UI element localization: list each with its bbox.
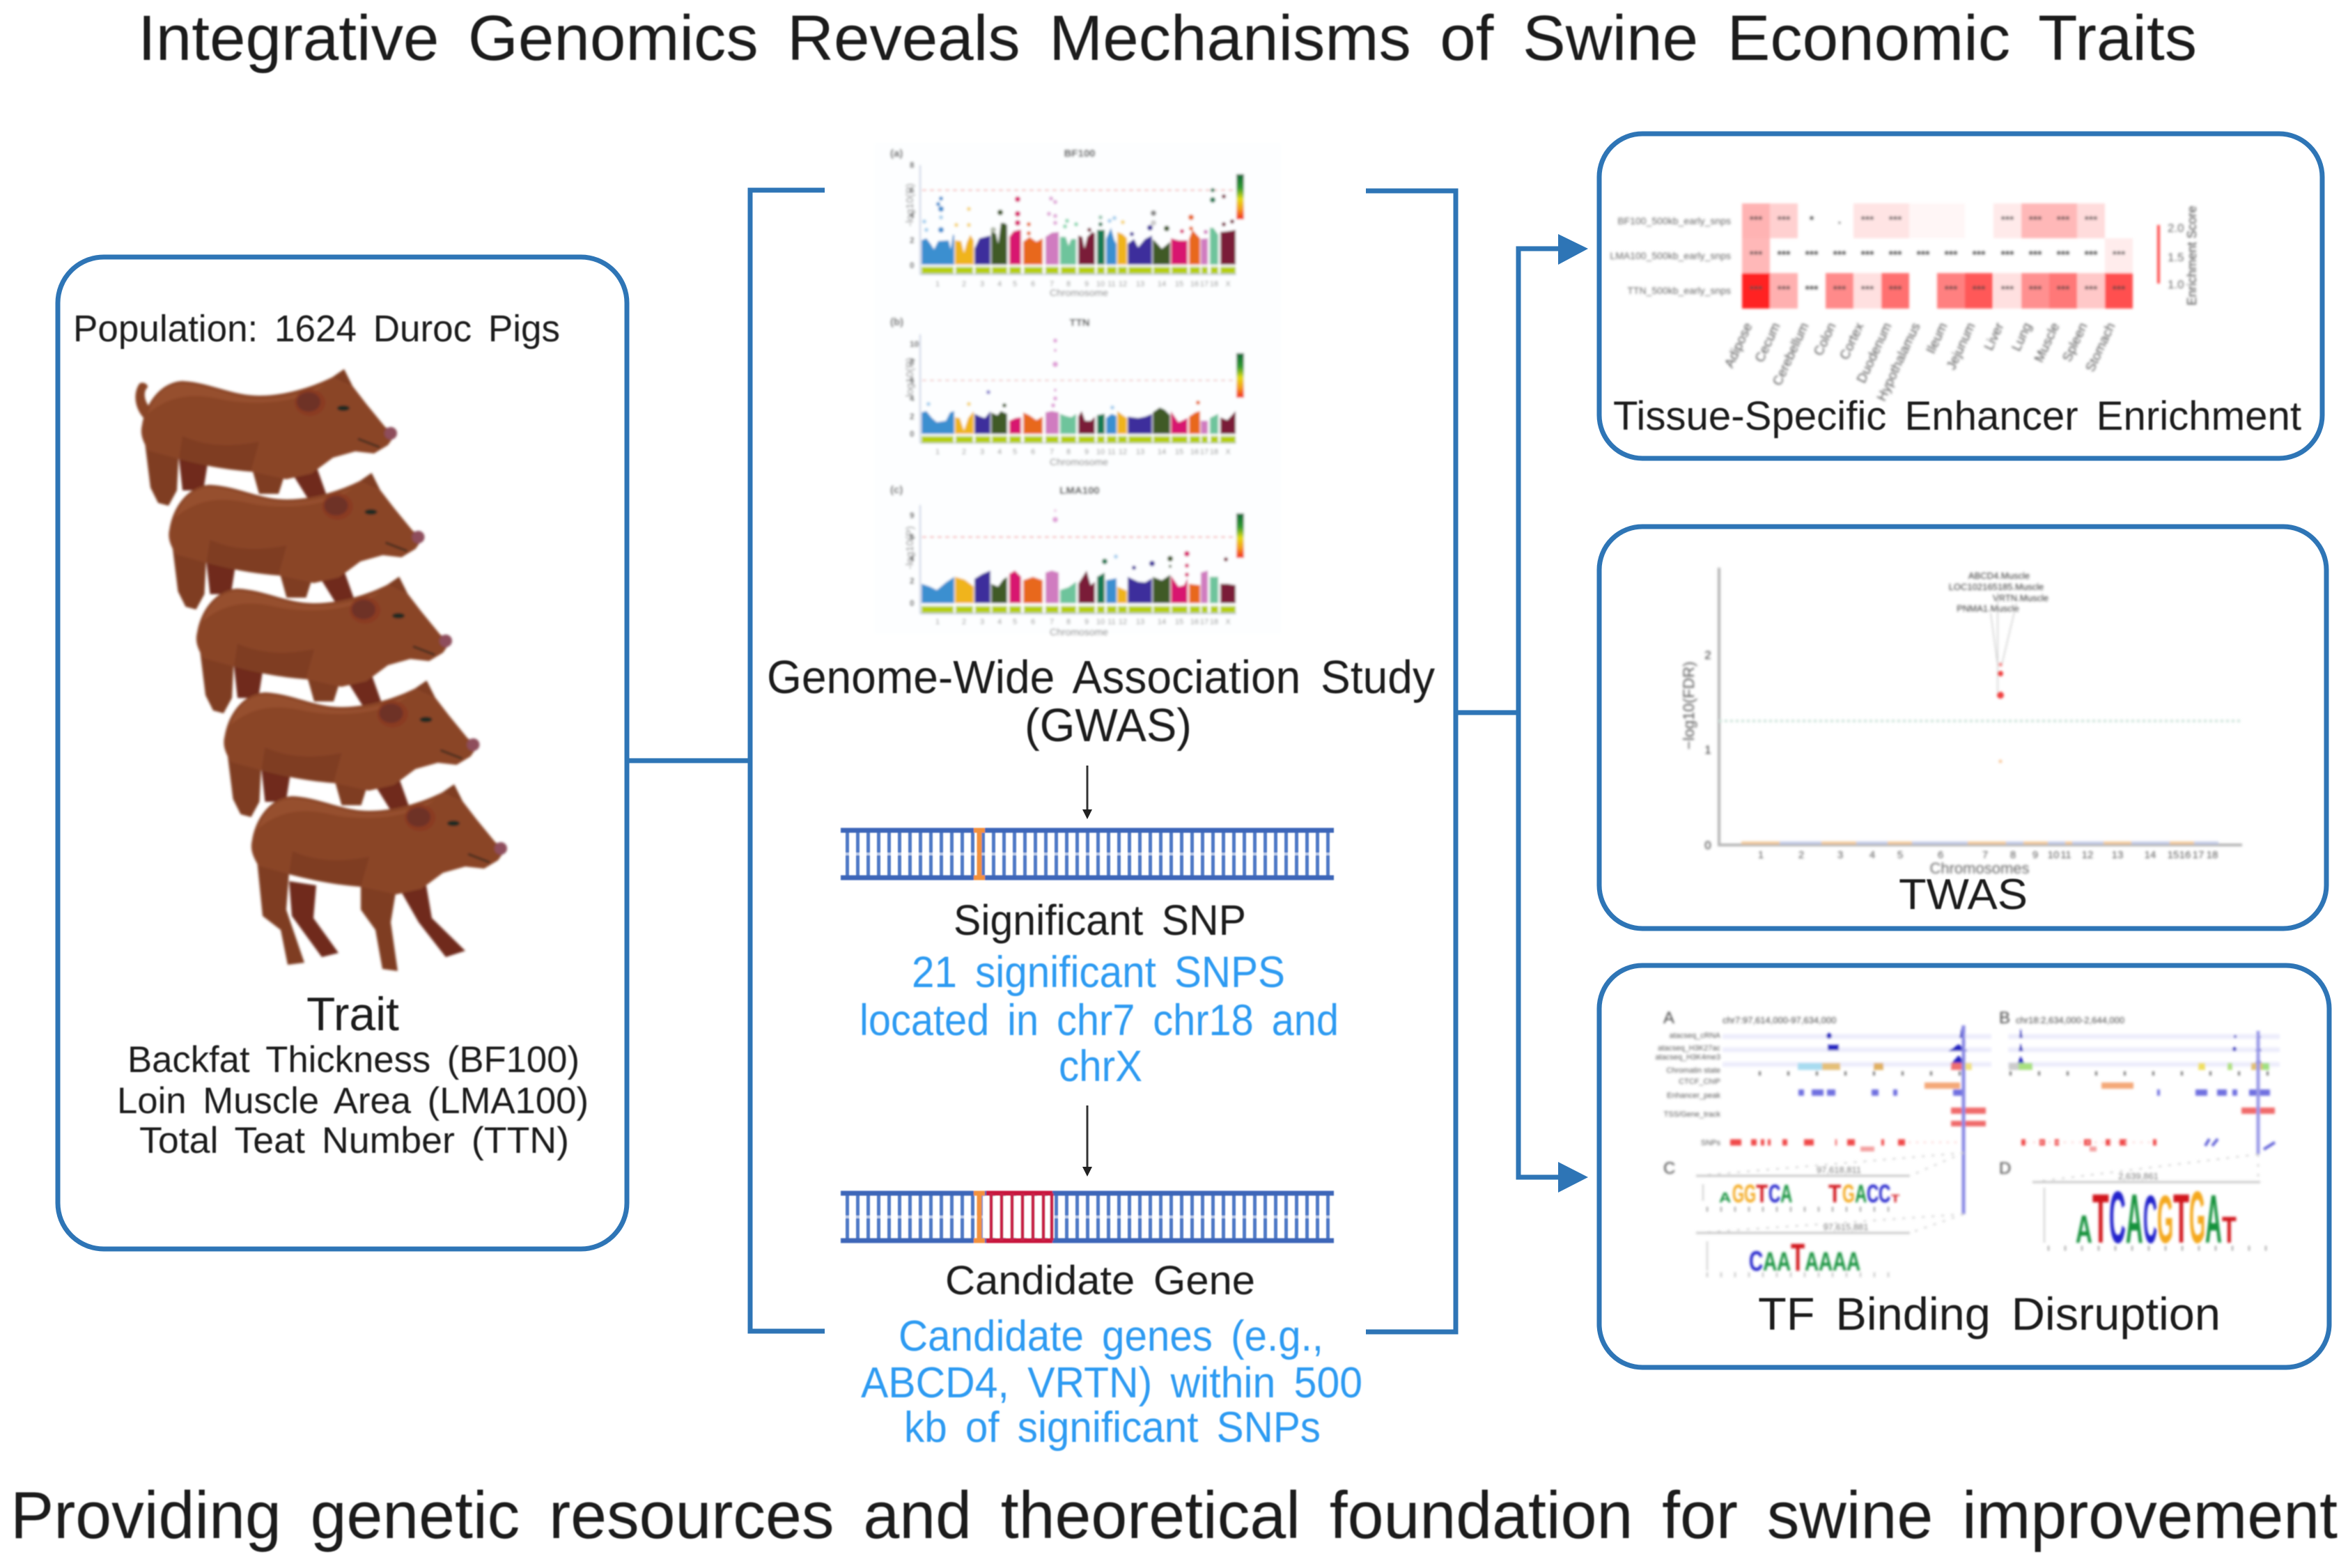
heading: significant SNP: Significant SNP (954, 896, 1246, 944)
TWAS Manhattan plot: −log10(FDR) (1680, 662, 1697, 750)
heatmap significance marks: *** (2085, 249, 2098, 261)
heatmap tissue labels: Ileum (1924, 320, 1951, 356)
TWAS Manhattan plot: 17 (2193, 849, 2204, 861)
heatmap tissue labels: Cecum (1752, 320, 1784, 365)
TWAS Manhattan plot: 6 (1938, 849, 1943, 861)
motif logo: C upper: G (1732, 1181, 1744, 1208)
genome tracks and motif logos: Enhancer_peak (1667, 1092, 1720, 1100)
motif logo: C lower: A (1819, 1248, 1833, 1277)
TWAS Manhattan plot: 5 (1897, 849, 1903, 861)
TWAS Manhattan plot: 9 (2032, 849, 2038, 861)
trait list (117, 1039, 589, 1161)
arrow: GWAS to SNP (1082, 766, 1092, 819)
heatmap significance marks: *** (2001, 249, 2014, 261)
trait list: Backfat Thickness (BF100) (127, 1039, 580, 1080)
genome tracks and motif logos (1655, 1009, 2280, 1279)
Manhattan plot: LMA100: 2 (962, 448, 966, 456)
Manhattan plot: LMA100: 13 (1136, 448, 1144, 456)
Manhattan plot: BF100: 3 (980, 280, 984, 288)
Manhattan plot: LMA100: Chromosome (1050, 456, 1108, 467)
Manhattan plot: TTN: 2 (962, 618, 966, 626)
Manhattan plot: TTN: 16 (1190, 618, 1199, 626)
motif logo: C lower: A (1805, 1248, 1819, 1277)
heatmap significance marks: *** (2029, 249, 2042, 261)
text: SNP result: located in chr7 chr18 and (860, 996, 1339, 1045)
heatmap significance marks: *** (1778, 215, 1791, 226)
TWAS Manhattan plot: PNMA1.Muscle (1957, 603, 2019, 614)
Manhattan plot: LMA100: 6 (1031, 448, 1035, 456)
motif logo: C upper (1719, 1180, 1899, 1209)
heatmap significance marks: *** (1778, 249, 1791, 261)
motif logo: C lower (1749, 1235, 1860, 1279)
heatmap significance marks: *** (1917, 249, 1930, 261)
genome tracks and motif logos: atacseq_cRNA (1670, 1032, 1721, 1040)
heatmap tissue labels (1722, 320, 2119, 403)
TWAS Manhattan plot: VRTN.Muscle (1993, 593, 2048, 603)
motif logo: D: A (2205, 1182, 2222, 1257)
heatmap (1610, 203, 2199, 403)
Manhattan plot: LMA100: 4 (997, 448, 1002, 456)
Manhattan plot: TTN: 7 (1050, 618, 1054, 626)
heatmap significance marks: *** (1973, 284, 1986, 296)
Manhattan plot: LMA100: 7 (1050, 448, 1054, 456)
Manhattan plot: BF100: 13 (1136, 280, 1144, 288)
arrow: to enhancer panel (1558, 234, 1588, 265)
panel: tissue-specific enhancer enrichment (1599, 134, 2322, 458)
icon: DNA with SNP (840, 828, 1335, 880)
Manhattan plot: TTN: 9 (910, 511, 915, 520)
Manhattan plot: BF100: 1 (935, 280, 940, 288)
text: SNP result: chrX (1059, 1042, 1142, 1091)
heading: enhancer enrichment: Tissue-Specific Enhancer Enrichment (1613, 394, 2301, 439)
Manhattan plot: LMA100: 17 (1200, 448, 1208, 456)
motif logo: C upper: A (1855, 1180, 1867, 1208)
heatmap significance marks: *** (1750, 249, 1763, 261)
Manhattan plot: LMA100: 6 (910, 375, 915, 385)
title: Integrative Genomics Reveals Mechanisms of Swine Economic Traits (138, 3, 2197, 74)
TWAS Manhattan plot: 14 (2145, 849, 2156, 861)
motif logo: D: T (2092, 1180, 2109, 1258)
motif logo: D: G (2189, 1175, 2205, 1259)
heatmap tissue labels: Liver (1982, 320, 2007, 352)
connector: bracket to outcome panels (1456, 249, 1559, 1177)
motif logo: C lower: A (1846, 1248, 1860, 1277)
Manhattan plot: LMA100: 11 (1107, 448, 1116, 456)
heatmap tissue labels: Cerebellum (1770, 320, 1812, 388)
Manhattan plot: BF100: X (1225, 280, 1231, 288)
genome tracks and motif logos: TSS/Gene_track (1664, 1110, 1720, 1119)
Manhattan plot: LMA100: 15 (1175, 448, 1183, 456)
heatmap significance marks: *** (1750, 284, 1763, 296)
TWAS Manhattan plot: LOC102165185.Muscle (1949, 582, 2044, 592)
motif logo: C upper: G (1842, 1181, 1855, 1208)
heatmap significance marks: *** (2029, 215, 2042, 226)
TWAS Manhattan plot: 15 (2168, 849, 2179, 861)
TWAS Manhattan plot: 3 (1837, 849, 1843, 861)
Manhattan plot: BF100: 6 (1031, 280, 1035, 288)
motif logo: C lower: A (1833, 1248, 1846, 1277)
heatmap tissue labels: Adipose (1722, 320, 1756, 370)
heatmap tissue labels: Lung (2009, 320, 2035, 353)
Manhattan plot: BF100: 12 (1119, 280, 1127, 288)
genome tracks and motif logos: chr7:97,614,000-97,634,000 (1723, 1015, 1836, 1025)
Manhattan plot: LMA100: X (1225, 448, 1231, 456)
Manhattan plot: TTN: X (1225, 618, 1231, 626)
Manhattan plot: TTN: 12 (1119, 618, 1127, 626)
genome tracks and motif logos: D (1999, 1159, 2011, 1178)
trait list: Loin Muscle Area (LMA100) (117, 1080, 589, 1121)
Manhattan plot: TTN: 2 (910, 576, 915, 586)
genome tracks and motif logos: Chromatin state (1666, 1066, 1720, 1075)
heading: GWAS: Genome-Wide Association Study (767, 651, 1435, 704)
Manhattan plot: LMA100: 10 (910, 339, 919, 349)
heatmap significance marks (1750, 215, 2126, 296)
text: SNP result: 21 significant SNPS (912, 948, 1285, 997)
icon: stack of five pigs (135, 369, 507, 971)
heatmap significance marks: *** (1833, 249, 1846, 261)
Manhattan plot: BF100: 14 (1158, 280, 1166, 288)
panel: TWAS (1599, 527, 2326, 929)
Manhattan plot: TTN: LMA100 (1059, 485, 1100, 497)
trait list: Total Teat Number (TTN) (139, 1120, 569, 1161)
panel: TF binding disruption (1599, 965, 2329, 1367)
population label: Population: 1624 Duroc Pigs (73, 308, 560, 350)
heatmap significance marks: *** (1945, 284, 1958, 296)
genome tracks and motif logos: 97,618,811 (1817, 1165, 1861, 1175)
motif logo: D: T (2222, 1209, 2237, 1251)
text: candidate gene result: kb of significant SNPs (904, 1404, 1321, 1452)
heatmap colour legend: 1.5 (2168, 251, 2184, 264)
TWAS Manhattan plot: 11 (2060, 849, 2071, 861)
TWAS Manhattan plot: 2 (1704, 649, 1711, 662)
Manhattan plot: LMA100: (b) (890, 316, 903, 328)
heatmap colour legend: 2.0 (2168, 222, 2184, 235)
Manhattan plot: BF100: 4 (910, 210, 915, 220)
motif logo: C upper: T (1756, 1180, 1768, 1208)
Manhattan plot: TTN: 18 (1210, 618, 1218, 626)
text: candidate gene result: ABCD4, VRTN) within 500 (861, 1359, 1362, 1407)
Manhattan plot: BF100: (a) (890, 148, 903, 160)
Manhattan plot: TTN: 15 (1175, 618, 1183, 626)
Manhattan plot: BF100: 16 (1190, 280, 1199, 288)
heatmap significance marks: *** (2057, 284, 2070, 296)
Manhattan plot: BF100: 5 (1013, 280, 1017, 288)
Manhattan plot: LMA100: 0 (910, 429, 915, 439)
heatmap significance marks: *** (2029, 284, 2042, 296)
connector: traits to analysis bracket (627, 758, 750, 763)
text: candidate gene result (861, 1312, 1362, 1452)
Manhattan plot: LMA100: 4 (910, 394, 915, 403)
genome tracks and motif logos: atacseq_H3K4me3 (1655, 1053, 1720, 1062)
heatmap significance marks: *** (1945, 249, 1958, 261)
genome tracks and motif logos: CTCF_ChIP (1679, 1078, 1720, 1086)
heatmap significance marks: *** (1889, 249, 1902, 261)
heatmap significance marks: *** (2057, 215, 2070, 226)
TWAS Manhattan plot: 1 (1758, 849, 1764, 861)
Manhattan plot: LMA100: TTN (1069, 317, 1090, 329)
heatmap significance marks: . (1838, 215, 1841, 226)
Manhattan plot: LMA100: 5 (1013, 448, 1017, 456)
heatmap significance marks: *** (2001, 284, 2014, 296)
genome tracks and motif logos: C (1663, 1159, 1675, 1178)
heatmap significance marks: *** (1889, 284, 1902, 296)
motif logo: D (2076, 1175, 2237, 1259)
TWAS Manhattan plot (1680, 568, 2242, 877)
TWAS Manhattan plot: 13 (2112, 849, 2123, 861)
TWAS Manhattan plot: 1 (1704, 743, 1711, 756)
heatmap significance marks: *** (2057, 249, 2070, 261)
heatmap significance marks: *** (2085, 215, 2098, 226)
heatmap significance marks: *** (1889, 215, 1902, 226)
motif logo: C upper: C (1879, 1180, 1890, 1208)
motif logo: C lower: A (1763, 1248, 1777, 1277)
TWAS Manhattan plot: 12 (2082, 849, 2093, 861)
motif logo: C upper: C (1768, 1180, 1780, 1208)
genome tracks and motif logos: A (1663, 1009, 1674, 1027)
bracket: right (1366, 191, 1456, 1332)
heatmap significance marks: *** (1861, 249, 1874, 261)
motif logo: C lower: T (1791, 1235, 1805, 1279)
Manhattan plot: BF100: 17 (1200, 280, 1208, 288)
heatmap significance marks: *** (2001, 215, 2014, 226)
TWAS Manhattan plot: 10 (2048, 849, 2059, 861)
heatmap row labels: TTN_500kb_early_snps (1627, 285, 1731, 296)
heatmap tissue labels: Muscle (2032, 320, 2063, 365)
heatmap row labels: BF100_500kb_early_snps (1617, 215, 1731, 226)
TWAS Manhattan plot: 2 (1798, 849, 1804, 861)
heatmap significance marks: *** (1778, 284, 1791, 296)
Manhattan plot: LMA100: 3 (980, 448, 984, 456)
TWAS Manhattan plot: 18 (2207, 849, 2218, 861)
Manhattan plot: BF100: 4 (997, 280, 1002, 288)
Manhattan plot: LMA100: -log10(P) (904, 357, 916, 401)
motif logo: D: T (2173, 1181, 2189, 1258)
Manhattan plot: LMA100: 10 (1096, 448, 1105, 456)
conclusion line: Providing genetic resources and theoretical foundation for swine improvement (10, 1478, 2338, 1553)
Manhattan plot: TTN: 4 (997, 618, 1002, 626)
Manhattan plot: BF100: 18 (1210, 280, 1218, 288)
Manhattan plot: LMA100: 8 (910, 357, 915, 367)
Manhattan plot: BF100: -log10(P) (904, 183, 916, 226)
TWAS Manhattan plot: 0 (1704, 839, 1711, 852)
icon: DNA with candidate gene (840, 1191, 1335, 1243)
Manhattan plot: TTN: 0 (910, 598, 915, 608)
Manhattan plot: TTN: 10 (1096, 618, 1105, 626)
TWAS Manhattan plot: 4 (1869, 849, 1875, 861)
Manhattan plot: LMA100: 9 (1084, 448, 1089, 456)
Manhattan plot: BF100: 15 (1175, 280, 1183, 288)
motif logo: C upper: A (1719, 1190, 1731, 1206)
Manhattan plot: TTN: 6 (1031, 618, 1035, 626)
Manhattan plot: BF100: 6 (910, 185, 915, 195)
motif logo: D: C (2143, 1182, 2157, 1258)
Manhattan plot: TTN: 13 (1136, 618, 1144, 626)
bracket: left (750, 190, 825, 1331)
heatmap tissue labels: Stomach (2083, 320, 2119, 374)
motif logo: D: A (2076, 1207, 2092, 1251)
heatmap significance marks: *** (2085, 284, 2098, 296)
heatmap significance marks: *** (1805, 284, 1819, 296)
chart: GWAS Manhattan plots (874, 143, 1282, 637)
motif logo: D: G (2157, 1183, 2173, 1258)
heatmap tissue labels: Spleen (2060, 320, 2091, 364)
motif logo: D: A (2126, 1179, 2143, 1257)
Manhattan plot: LMA100: 12 (1119, 448, 1127, 456)
heading: GWAS (767, 651, 1435, 752)
Manhattan plot: BF100: 9 (1084, 280, 1089, 288)
TWAS Manhattan plot: 16 (2179, 849, 2191, 861)
heatmap colour legend: Enrichment Score (2185, 205, 2199, 306)
motif logo: C upper: T (1891, 1193, 1899, 1205)
genome tracks and motif logos: atacseq_H3K27ac (1658, 1044, 1720, 1053)
genome tracks and motif logos: chr18:2,634,000-2,644,000 (2016, 1015, 2124, 1025)
heatmap significance marks: *** (1861, 284, 1874, 296)
Manhattan plot: BF100: Chromosome (1050, 287, 1108, 298)
genome tracks and motif logos: 2,639,861 (2118, 1171, 2159, 1181)
Manhattan plot: BF100 (890, 148, 1244, 298)
Manhattan plot: TTN: 5 (1013, 618, 1017, 626)
heatmap row labels: LMA100_500kb_early_snps (1610, 250, 1731, 261)
Manhattan plot: BF100: 0 (910, 261, 915, 270)
Manhattan plot: TTN: 17 (1200, 618, 1208, 626)
motif logo: C lower: A (1777, 1248, 1791, 1277)
motif logo: C lower: C (1749, 1246, 1763, 1277)
Manhattan plot: TTN: 11 (1107, 618, 1116, 626)
Manhattan plot: TTN: Chromosome (1050, 626, 1108, 637)
Manhattan plot: LMA100: 8 (1066, 448, 1071, 456)
genome tracks and motif logos: 97,615,881 (1823, 1222, 1869, 1232)
heatmap significance marks: *** (1833, 284, 1846, 296)
Manhattan plot: TTN: 9 (1084, 618, 1089, 626)
genome tracks and motif logos: B (1999, 1009, 2010, 1027)
Manhattan plot: LMA100: 14 (1158, 448, 1166, 456)
TWAS Manhattan plot: 8 (2010, 849, 2016, 861)
Manhattan plot: LMA100: 1 (935, 448, 940, 456)
Manhattan plot: TTN: -log10(P) (904, 526, 916, 569)
Manhattan plot: TTN: 4 (910, 554, 915, 564)
heatmap significance marks: *** (2113, 249, 2126, 261)
Manhattan plot: TTN (890, 484, 1244, 637)
heading: TF binding disruption: TF Binding Disruption (1758, 1288, 2221, 1340)
Manhattan plot: BF100: 10 (1096, 280, 1105, 288)
text: SNP result (860, 948, 1339, 1091)
TWAS Manhattan plot: 7 (1982, 849, 1988, 861)
Manhattan plot: TTN: 1 (935, 618, 940, 626)
Manhattan plot: BF100: 2 (962, 280, 966, 288)
heatmap tissue labels: Jejunum (1944, 320, 1979, 372)
Manhattan plot: BF100: 11 (1107, 280, 1116, 288)
heatmap tissue labels: Colon (1812, 320, 1840, 358)
arrow: SNP to candidate gene (1082, 1105, 1092, 1177)
Manhattan plot: TTN: 3 (980, 618, 984, 626)
heatmap row labels (1610, 215, 1731, 296)
heading: GWAS: (GWAS) (1025, 699, 1192, 752)
Manhattan plot: TTN: 14 (1158, 618, 1166, 626)
heatmap significance marks: *** (2113, 284, 2126, 296)
Manhattan plot: TTN: (c) (890, 484, 903, 496)
heatmap significance marks: *** (1805, 249, 1819, 261)
Manhattan plot: TTN: 8 (1066, 618, 1071, 626)
Manhattan plot: BF100: 2 (910, 235, 915, 245)
arrow: to TF panel (1558, 1162, 1588, 1193)
Manhattan plot: BF100: BF100 (1064, 148, 1096, 160)
motif logo: C upper: C (1867, 1180, 1879, 1208)
heatmap significance marks: *** (1973, 249, 1986, 261)
heatmap tissue labels: Hypothalamus (1874, 320, 1924, 403)
motif logo: D: C (2109, 1176, 2126, 1259)
Manhattan plot: TTN: 6 (910, 532, 915, 542)
TWAS Manhattan plot: Chromosomes (1929, 860, 2030, 877)
motif logo: C upper: G (1744, 1181, 1756, 1208)
heatmap significance marks: *** (1861, 215, 1874, 226)
heatmap colour legend (2159, 205, 2199, 306)
heatmap significance marks: * (1810, 215, 1814, 226)
heatmap colour legend: 1.0 (2168, 278, 2184, 291)
heatmap tissue labels: Cortex (1837, 320, 1867, 362)
TWAS Manhattan plot: ABCD4.Muscle (1968, 570, 2030, 581)
Manhattan plot: LMA100: 16 (1190, 448, 1199, 456)
motif logo: C upper: T (1828, 1180, 1841, 1209)
trait heading: Trait (306, 988, 399, 1041)
Manhattan plot: BF100: 8 (910, 160, 915, 170)
Manhattan plot: LMA100: 18 (1210, 448, 1218, 456)
heading: TWAS: TWAS (1899, 871, 2028, 919)
Manhattan plot: BF100: 8 (1066, 280, 1071, 288)
motif logo: C upper: A (1780, 1180, 1792, 1208)
panel: population and traits (58, 257, 627, 1249)
genome tracks and motif logos: SNPs (1701, 1139, 1720, 1147)
heatmap tissue labels: Duodenum (1854, 320, 1895, 385)
heatmap significance marks: *** (1750, 215, 1763, 226)
Manhattan plot: BF100: 7 (1050, 280, 1054, 288)
text: candidate gene result: Candidate genes (e.g., (899, 1312, 1323, 1360)
Manhattan plot: LMA100: 2 (910, 412, 915, 421)
Manhattan plot: LMA100 (890, 316, 1244, 467)
heading: candidate gene: Candidate Gene (945, 1258, 1255, 1303)
